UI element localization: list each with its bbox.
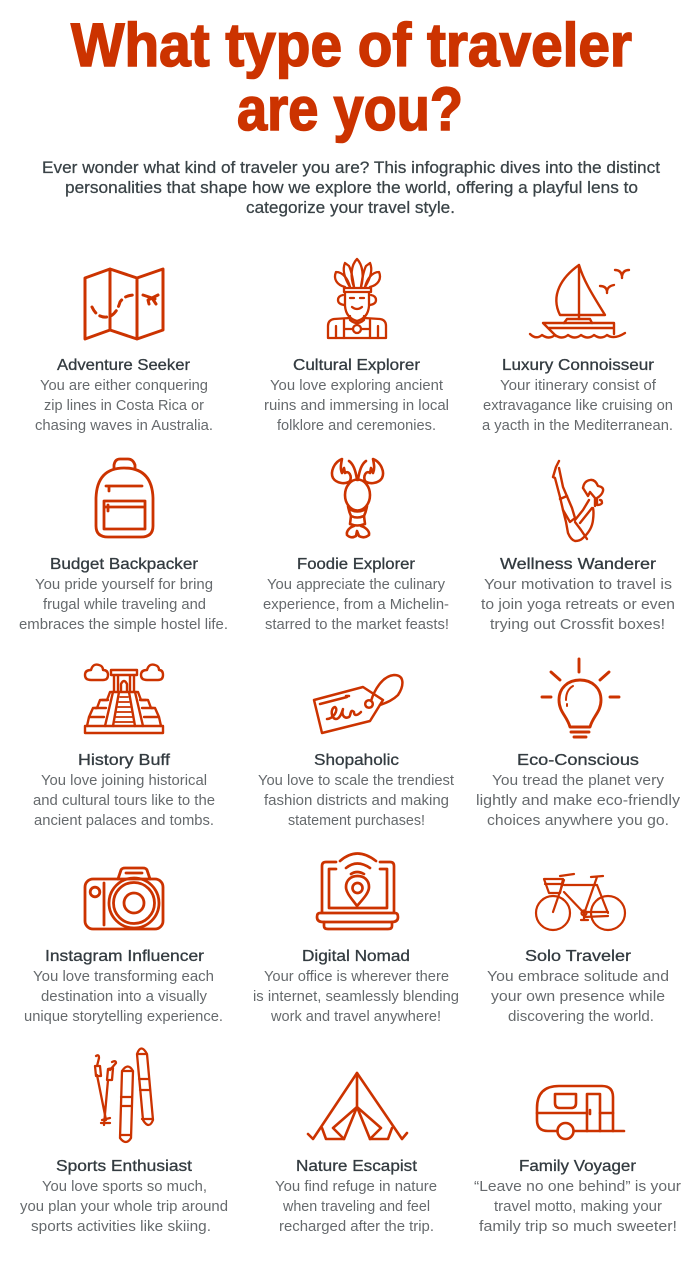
panel: Instagram Influencer bbox=[24, 868, 223, 1025]
heading: Nature Escapist bbox=[296, 1158, 418, 1175]
icon: bicycle with basket bbox=[536, 874, 625, 930]
icon: lobster bbox=[332, 459, 383, 537]
description bbox=[19, 576, 228, 633]
description bbox=[263, 576, 449, 633]
icon: folded map bbox=[85, 269, 163, 339]
panel: Digital Nomad bbox=[253, 854, 459, 1025]
heading: Budget Backpacker bbox=[50, 556, 199, 573]
description: Your itinerary consist of bbox=[500, 377, 657, 394]
panel: Family Voyager bbox=[474, 1086, 681, 1235]
description bbox=[482, 377, 673, 434]
description: fashion districts and making bbox=[264, 792, 449, 809]
description bbox=[35, 377, 213, 434]
description: You love exploring ancient bbox=[270, 377, 444, 394]
icon: person with feather headdress bbox=[328, 259, 386, 338]
description bbox=[474, 1178, 681, 1235]
description: when traveling and feel bbox=[282, 1198, 430, 1215]
title bbox=[71, 11, 632, 143]
heading: History Buff bbox=[78, 752, 171, 769]
description: folklore and ceremonies. bbox=[277, 417, 436, 434]
heading: Wellness Wanderer bbox=[500, 556, 657, 573]
intro text: Ever wonder what kind of traveler you are? This infographic dives into the distinct bbox=[42, 159, 660, 177]
description: work and travel anywhere! bbox=[270, 1008, 441, 1025]
description: You pride yourself for bring bbox=[35, 576, 213, 593]
title: What type of traveler bbox=[71, 11, 632, 79]
description: You love joining historical bbox=[41, 772, 207, 789]
heading: Solo Traveler bbox=[525, 948, 632, 965]
heading: Shopaholic bbox=[314, 752, 399, 769]
heading: Luxury Connoisseur bbox=[502, 357, 655, 374]
description: travel motto, making your bbox=[494, 1198, 662, 1215]
description: Your office is wherever there bbox=[264, 968, 449, 985]
description: frugal while traveling and bbox=[43, 596, 206, 613]
description: starred to the market feasts! bbox=[265, 616, 449, 633]
description: your own presence while bbox=[491, 988, 665, 1005]
panel: Nature Escapist bbox=[275, 1073, 437, 1235]
description bbox=[20, 1178, 228, 1235]
description: You tread the planet very bbox=[492, 772, 665, 789]
description: family trip so much sweeter! bbox=[479, 1218, 677, 1235]
description: extravagance like cruising on bbox=[483, 397, 673, 414]
description: You find refuge in nature bbox=[275, 1178, 437, 1195]
description: You appreciate the culinary bbox=[267, 576, 445, 593]
heading: Cultural Explorer bbox=[293, 357, 421, 374]
description: to join yoga retreats or even bbox=[481, 596, 675, 613]
description bbox=[476, 772, 681, 829]
description: a yacth in the Mediterranean. bbox=[482, 417, 673, 434]
description bbox=[253, 968, 459, 1025]
description: discovering the world. bbox=[508, 1008, 654, 1025]
description bbox=[24, 968, 223, 1025]
description: you plan your whole trip around bbox=[20, 1198, 228, 1215]
description: ancient palaces and tombs. bbox=[34, 812, 214, 829]
panel: History Buff bbox=[33, 665, 215, 829]
heading: Family Voyager bbox=[519, 1158, 637, 1175]
heading: Digital Nomad bbox=[302, 948, 410, 965]
description: ruins and immersing in local bbox=[264, 397, 449, 414]
intro text bbox=[42, 159, 660, 217]
intro text: personalities that shape how we explore the world, offering a playful lens to bbox=[65, 179, 638, 197]
description bbox=[487, 968, 669, 1025]
icon: camera bbox=[85, 868, 163, 929]
heading: Adventure Seeker bbox=[57, 357, 191, 374]
panel: Wellness Wanderer bbox=[481, 461, 675, 633]
description: chasing waves in Australia. bbox=[35, 417, 213, 434]
panel: Cultural Explorer bbox=[264, 259, 449, 434]
panel: Shopaholic bbox=[258, 675, 455, 829]
title: are you? bbox=[237, 75, 463, 143]
panel: Adventure Seeker bbox=[35, 269, 213, 434]
panel: Solo Traveler bbox=[487, 874, 669, 1025]
description bbox=[275, 1178, 437, 1235]
description: is internet, seamlessly blending bbox=[253, 988, 459, 1005]
heading: Instagram Influencer bbox=[45, 948, 205, 965]
description bbox=[481, 576, 675, 633]
description: recharged after the trip. bbox=[279, 1218, 434, 1235]
description: destination into a visually bbox=[41, 988, 207, 1005]
intro text: categorize your travel style. bbox=[246, 199, 455, 217]
description: trying out Crossfit boxes! bbox=[490, 616, 665, 633]
description: experience, from a Michelin- bbox=[263, 596, 449, 613]
icon: laptop with location pin bbox=[317, 854, 398, 929]
description: You embrace solitude and bbox=[487, 968, 669, 985]
description bbox=[258, 772, 455, 829]
panel: Sports Enthusiast bbox=[20, 1048, 228, 1235]
description: You love to scale the trendiest bbox=[258, 772, 455, 789]
description bbox=[33, 772, 215, 829]
description: You love transforming each bbox=[33, 968, 214, 985]
description bbox=[264, 377, 449, 434]
description: and cultural tours like to the bbox=[33, 792, 215, 809]
heading: Foodie Explorer bbox=[297, 556, 416, 573]
description: You are either conquering bbox=[40, 377, 208, 394]
panel: Budget Backpacker bbox=[19, 459, 228, 633]
icon: stepped pyramid with clouds bbox=[85, 665, 163, 733]
panel: Eco-Conscious bbox=[476, 659, 681, 829]
icon: skis and poles bbox=[95, 1048, 153, 1142]
description: You love sports so much, bbox=[42, 1178, 207, 1195]
icon: yoga pose figure bbox=[553, 461, 603, 541]
description: “Leave no one behind” is your bbox=[474, 1178, 681, 1195]
panel: Luxury Connoisseur bbox=[482, 265, 673, 434]
icon: backpack bbox=[96, 459, 153, 537]
description: statement purchases! bbox=[288, 812, 425, 829]
description: choices anywhere you go. bbox=[487, 812, 669, 829]
icon: tent bbox=[308, 1073, 407, 1139]
description: lightly and make eco-friendly bbox=[476, 792, 681, 809]
icon: sailboat with birds bbox=[530, 265, 629, 338]
icon: price tag bbox=[314, 675, 402, 733]
icon: light bulb with rays bbox=[542, 659, 619, 737]
description: sports activities like skiing. bbox=[31, 1218, 211, 1235]
heading: Sports Enthusiast bbox=[56, 1158, 193, 1175]
description: Your motivation to travel is bbox=[484, 576, 672, 593]
description: zip lines in Costa Rica or bbox=[44, 397, 204, 414]
heading: Eco-Conscious bbox=[517, 752, 639, 769]
description: unique storytelling experience. bbox=[24, 1008, 223, 1025]
panel: Foodie Explorer bbox=[263, 459, 449, 633]
icon: camper trailer bbox=[537, 1086, 624, 1139]
description: embraces the simple hostel life. bbox=[19, 616, 228, 633]
